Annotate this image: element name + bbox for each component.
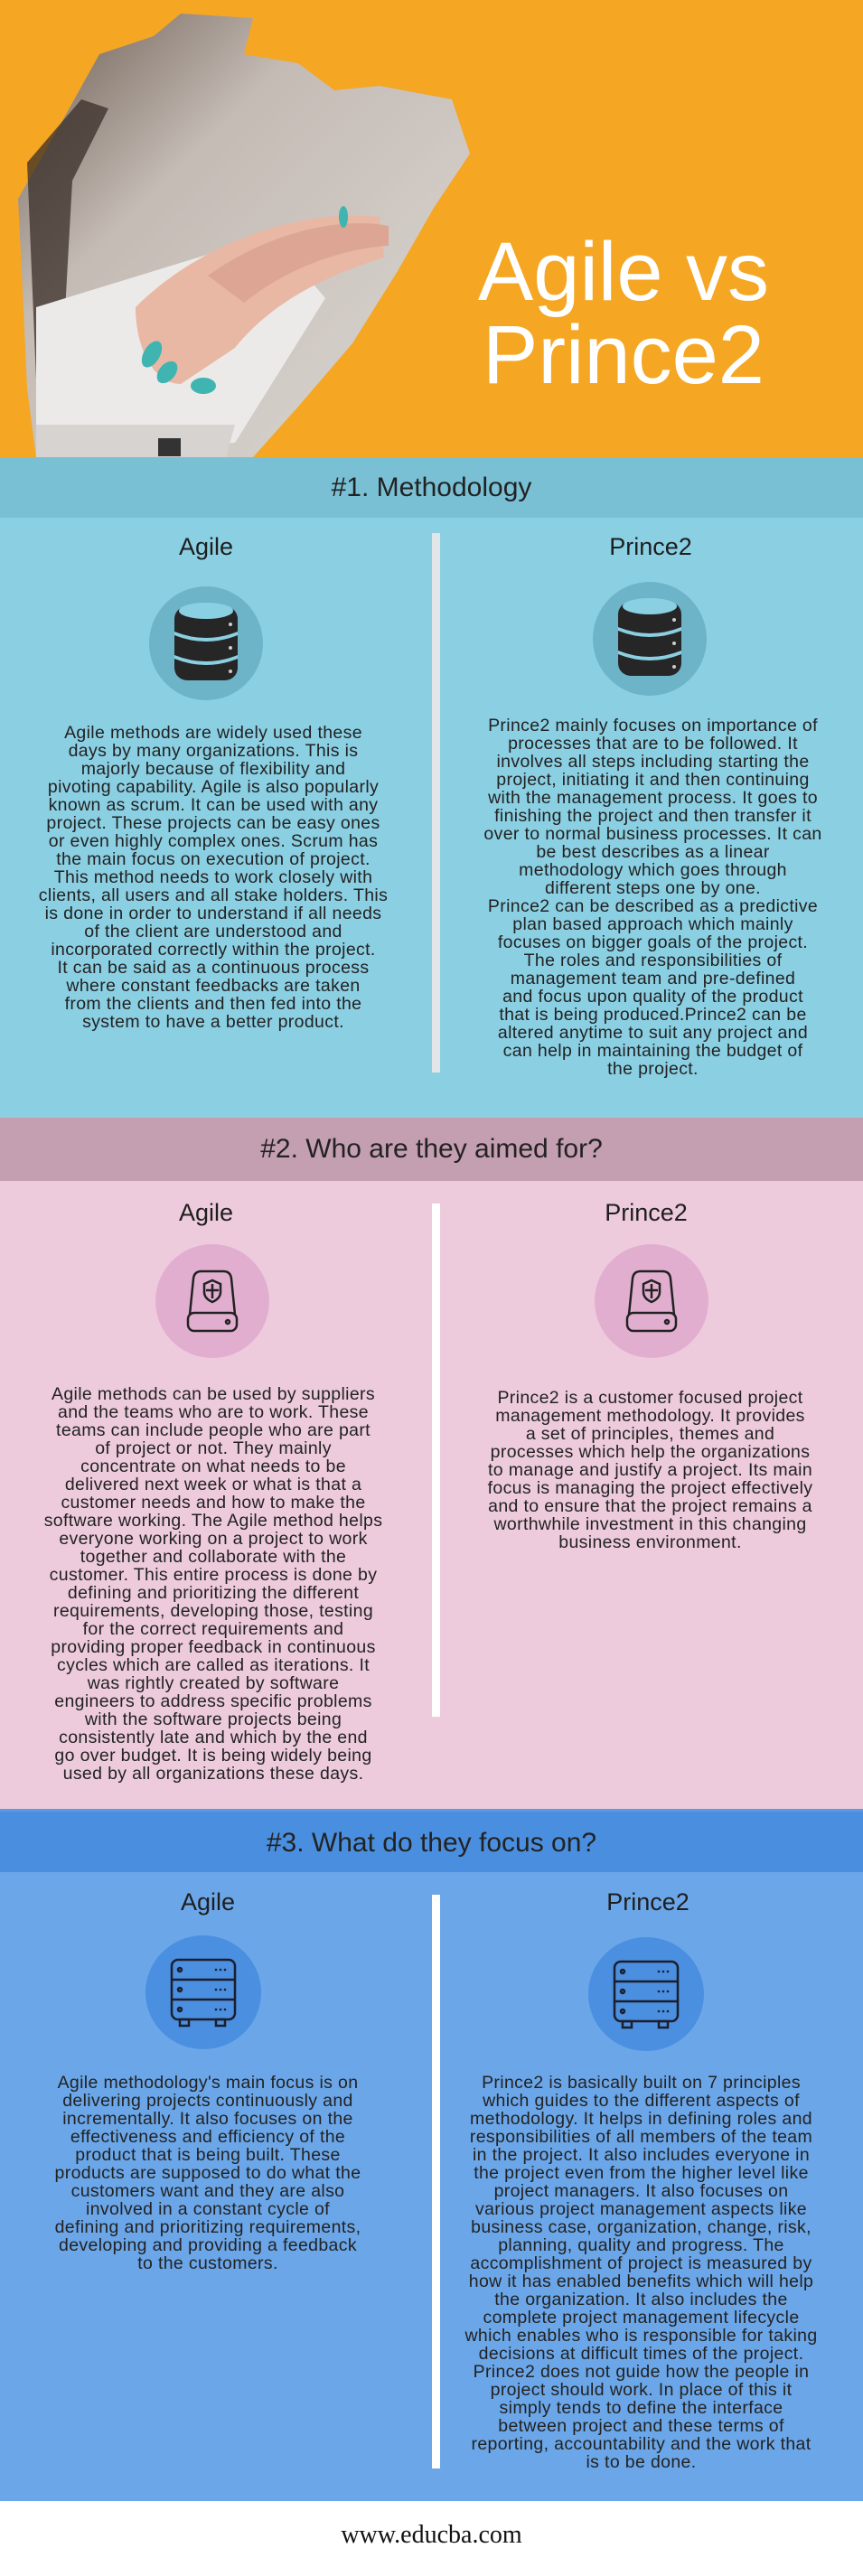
title: Agile vs <box>478 226 769 318</box>
text: Prince2 methodology: finishing the project and then transfer it <box>494 806 811 826</box>
section 2 band: Who are they aimed for <box>0 1118 863 1181</box>
heading: Prince2: Prince2 <box>609 533 692 560</box>
text: Agile aimed for: teams can include people who are part <box>56 1420 371 1440</box>
text: Prince2 methodology <box>483 716 822 1079</box>
text: Agile methodology: system to have a better product. <box>82 1012 344 1032</box>
text: Agile focus: delivering projects continuously and <box>62 2091 353 2111</box>
text: Agile methodology: project. These projects can be easy ones <box>46 813 380 833</box>
text: Agile focus: Agile methodology's main focus is on <box>58 2073 358 2093</box>
text: Prince2 focus: various project management aspects like <box>475 2199 807 2219</box>
text: Prince2 methodology: plan based approach which mainly <box>512 914 793 934</box>
text: Prince2 aimed for: and to ensure that the project remains a <box>488 1496 812 1516</box>
text: Agile aimed for: customer needs and how to make the <box>61 1493 366 1513</box>
text: Agile aimed for: requirements, developing those, testing <box>53 1601 373 1621</box>
text: Agile aimed for: everyone working on a project to work <box>59 1529 368 1549</box>
text: Prince2 aimed for: a set of principles, themes and <box>526 1424 774 1444</box>
text: Agile aimed for: go over budget. It is being widely being <box>54 1746 372 1766</box>
text: Agile methodology: This method needs to work closely with <box>54 867 372 887</box>
text: Prince2 aimed for: worthwhile investment in this changing <box>493 1514 807 1534</box>
text: Prince2 focus: project should work. In place of this it <box>491 2380 792 2400</box>
icon: server cabinet (Agile) <box>145 1935 261 2049</box>
text: Agile methodology: is done in order to understand if all needs <box>45 904 381 923</box>
heading: Agile: Agile <box>179 533 233 560</box>
text: Prince2 methodology: involves all steps including starting the <box>496 752 810 772</box>
text: Agile methodology: known as scrum. It can be used with any <box>49 795 378 815</box>
text: Prince2 aimed for: Prince2 is a customer focused project <box>497 1388 803 1408</box>
panel: methodology <box>0 518 863 1118</box>
text: Agile methodology: It can be said as a continuous process <box>58 958 369 978</box>
text: Prince2 focus <box>464 2073 818 2472</box>
text: Agile focus: products are supposed to do what the <box>55 2163 361 2183</box>
text: Agile methodology: pivoting capability. Agile is also popularly <box>48 777 379 797</box>
text: Agile aimed for: providing proper feedback in continuous <box>51 1637 376 1657</box>
text: Agile methodology: majorly because of flexibility and <box>81 759 345 779</box>
text: Prince2 focus: Prince2 does not guide how the people in <box>474 2362 809 2382</box>
section 1 band: Methodology: #1. Methodology <box>332 473 531 502</box>
text: Prince2 focus: the project even from the higher level like <box>474 2163 809 2183</box>
text: Prince2 focus: how it has enabled benefits which will help <box>469 2272 813 2291</box>
text: Prince2 focus: Prince2 is basically built on 7 principles <box>482 2073 801 2093</box>
text: Prince2 aimed for: management methodology. It provides <box>495 1406 805 1426</box>
text: Prince2 focus: business case, organization, change, risk, <box>471 2217 811 2237</box>
text: Agile focus: customers want and they are also <box>71 2181 344 2201</box>
text: Prince2 methodology: and focus upon quality of the product <box>502 987 803 1007</box>
text: Prince2 focus: reporting, accountability and the work that <box>471 2434 811 2454</box>
text: Agile aimed for: concentrate on what needs to be <box>80 1457 346 1476</box>
heading: Prince2: Prince2 <box>606 1888 689 1916</box>
text: Prince2 aimed for: business environment. <box>558 1532 742 1552</box>
section 2 band: Who are they aimed for: #2. Who are they aimed for? <box>260 1134 603 1164</box>
text: Prince2 methodology: that is being produced.Prince2 can be <box>499 1005 807 1025</box>
text: Prince2 focus: decisions at difficult times of the project. <box>479 2344 803 2364</box>
text: Agile methodology: days by many organizations. This is <box>69 741 358 761</box>
text: Agile methodology: Agile methods are widely used these <box>64 723 362 743</box>
section 3 band: What do they focus on: #3. What do they focus on? <box>267 1828 596 1858</box>
text: Agile focus: developing and providing a feedback <box>59 2235 357 2255</box>
text: Prince2 focus: accomplishment of project is measured by <box>470 2253 812 2273</box>
text: Agile aimed for: for the correct requirements and <box>83 1619 343 1639</box>
text: Prince2 aimed for: processes which help the organizations <box>491 1442 810 1462</box>
text: Prince2 methodology: altered anytime to suit any project and <box>498 1023 808 1043</box>
text: Prince2 methodology: Prince2 can be described as a predictive <box>488 896 818 916</box>
text: Agile focus <box>55 2073 361 2273</box>
text: Agile methodology: of the client are understood and <box>84 922 342 941</box>
text: Prince2 methodology: be best describes as a linear <box>536 842 770 862</box>
text: Prince2 methodology: focuses on bigger goals of the project. <box>498 932 808 952</box>
text: Prince2 focus: in the project. It also includes everyone in <box>473 2145 810 2165</box>
text: Agile methodology: the main focus on execution of project. <box>56 849 371 869</box>
text: Agile methodology: or even highly complex ones. Scrum has <box>49 831 378 851</box>
text: Prince2 methodology: different steps one by one. <box>545 878 761 898</box>
text: Prince2 focus: between project and these terms of <box>498 2416 784 2436</box>
text: Prince2 focus: methodology. It helps in defining roles and <box>470 2109 812 2129</box>
text: Prince2 aimed for: to manage and justify a project. Its main <box>488 1460 812 1480</box>
title <box>478 226 769 401</box>
text: Agile focus: to the customers. <box>137 2253 278 2273</box>
text: Prince2 methodology: Prince2 mainly focuses on importance of <box>488 716 818 735</box>
icon: database (Prince2) <box>593 582 707 696</box>
text: Agile aimed for: software working. The Agile method helps <box>44 1511 382 1531</box>
text: Prince2 aimed for: focus is managing the project effectively <box>488 1478 812 1498</box>
text: Agile aimed for: of project or not. They mainly <box>95 1438 332 1458</box>
text: Prince2 methodology: with the management process. It goes to <box>488 788 818 808</box>
text: Agile focus: product that is being built. These <box>75 2145 341 2165</box>
text: Agile aimed for: was rightly created by software <box>88 1673 339 1693</box>
text: Prince2 methodology: management team and pre-defined <box>511 969 795 988</box>
text: Prince2 focus: the organization. It also includes the <box>494 2290 788 2309</box>
text: Agile focus: involved in a constant cycle of <box>86 2199 330 2219</box>
text: Agile focus: defining and prioritizing requirements, <box>55 2217 361 2237</box>
text: Agile aimed for: consistently late and which by the end <box>59 1728 368 1747</box>
text: Prince2 focus: simply tends to define the interface <box>500 2398 783 2418</box>
section 1 band: Methodology <box>0 457 863 518</box>
text: Prince2 focus: planning, quality and progress. The <box>498 2235 784 2255</box>
text: Agile aimed for: together and collaborate with the <box>80 1547 346 1567</box>
text: Prince2 focus: is to be done. <box>586 2452 696 2472</box>
text: Agile aimed for: engineers to address specific problems <box>54 1691 372 1711</box>
text: Prince2 methodology: methodology which goes through <box>519 860 787 880</box>
text: Prince2 aimed for <box>488 1388 812 1552</box>
text: Agile aimed for: used by all organizations these days. <box>63 1764 363 1784</box>
heading: Agile: Agile <box>181 1888 235 1916</box>
icon: database (Agile) <box>149 586 263 700</box>
text: Agile methodology: clients, all users and all stake holders. This <box>39 885 388 905</box>
text: Agile focus: incrementally. It also focuses on the <box>62 2109 353 2129</box>
text: Agile aimed for: cycles which are called as iterations. It <box>57 1655 370 1675</box>
text: Agile methodology: incorporated correctly within the project. <box>51 940 376 960</box>
text: Prince2 focus: responsibilities of all members of the team <box>470 2127 812 2147</box>
text: Prince2 methodology: The roles and responsibilities of <box>524 951 782 970</box>
text: Agile aimed for: customer. This entire process is done by <box>50 1565 377 1585</box>
title: Prince2 <box>483 309 765 401</box>
text: Agile methodology <box>39 723 388 1032</box>
footer: website: www.educba.com <box>341 2521 522 2549</box>
text: Agile aimed for: Agile methods can be used by suppliers <box>52 1384 375 1404</box>
text: Prince2 methodology: the project. <box>607 1059 699 1079</box>
section 3 band: What do they focus on <box>0 1809 863 1872</box>
text: Prince2 methodology: processes that are to be followed. It <box>508 734 798 754</box>
hero image: hand typing on laptop <box>18 14 470 457</box>
text: Prince2 focus: which guides to the different aspects of <box>483 2091 800 2111</box>
text: Agile methodology: from the clients and then fed into the <box>65 994 361 1014</box>
text: Prince2 focus: which enables who is responsible for taking <box>464 2326 818 2346</box>
text: Agile aimed for <box>44 1384 382 1784</box>
text: Agile aimed for: defining and prioritizing the different <box>68 1583 359 1603</box>
text: Prince2 focus: complete project management lifecycle <box>483 2308 800 2328</box>
text: Agile aimed for: with the software projects being <box>85 1710 342 1729</box>
text: Prince2 methodology: project, initiating it and then continuing <box>496 770 810 790</box>
icon: server cabinet (Prince2) <box>588 1937 704 2051</box>
text: Agile focus: effectiveness and efficiency of the <box>70 2127 345 2147</box>
heading: Prince2: Prince2 <box>605 1199 688 1226</box>
text: Agile methodology: where constant feedbacks are taken <box>66 976 361 996</box>
text: Prince2 methodology: can help in maintaining the budget of <box>503 1041 802 1061</box>
text: Prince2 focus: project managers. It also focuses on <box>494 2181 788 2201</box>
icon: secure drive (Agile) <box>155 1244 269 1358</box>
panel: aimed for <box>0 1181 863 1809</box>
icon: secure drive (Prince2) <box>595 1244 708 1358</box>
text: Prince2 methodology: over to normal business processes. It can <box>483 824 822 844</box>
header panel <box>0 0 863 457</box>
text: Agile aimed for: and the teams who are to work. These <box>58 1402 369 1422</box>
text: Agile aimed for: delivered next week or what is that a <box>65 1475 361 1494</box>
heading: Agile: Agile <box>179 1199 233 1226</box>
panel: focus <box>0 1872 863 2501</box>
